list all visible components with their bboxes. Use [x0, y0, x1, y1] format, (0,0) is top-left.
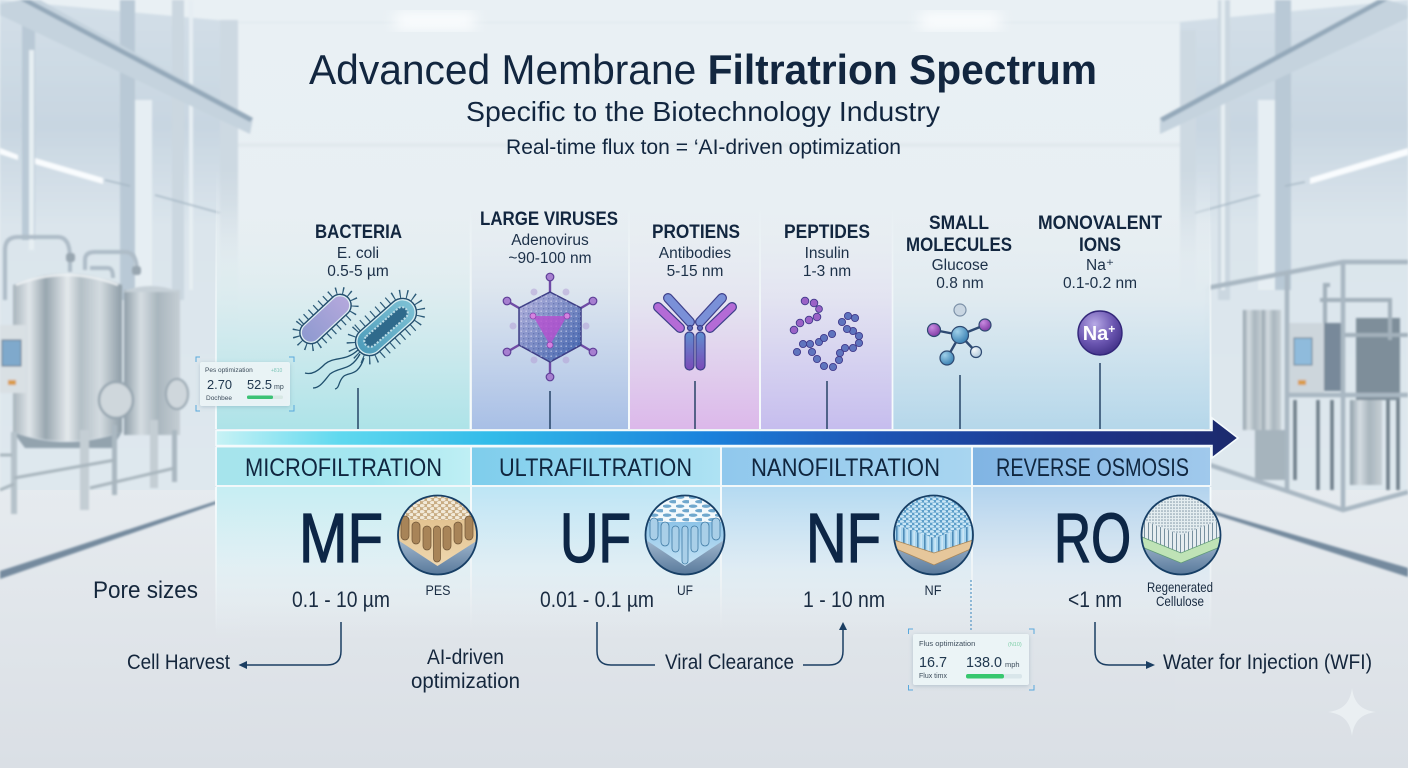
column: ultrafiltration	[472, 448, 726, 612]
text: E. coli size: 0.5-5 µm	[327, 263, 389, 280]
column: nanofiltration	[722, 448, 973, 612]
label: regenerated cellulose: Regenerated	[1147, 579, 1213, 595]
label: UF material: UF	[677, 582, 693, 598]
panel: large viruses	[480, 209, 618, 429]
column backgrounds	[216, 205, 1210, 632]
value: UF pore size: 0.01 - 0.1 µm	[540, 587, 654, 612]
label: nanofiltration: NANOFILTRATION	[751, 454, 940, 482]
abbreviation: RO: RO	[1054, 499, 1131, 577]
text: AI-driven optimization: AI-driven	[427, 645, 504, 669]
label: regenerated cellulose: Cellulose	[1156, 593, 1204, 609]
icon: sodium ion	[1078, 311, 1122, 355]
abbreviation: NF: NF	[806, 499, 881, 577]
heading: peptides: PEPTIDES	[784, 222, 870, 243]
callout: flux optimization right: (N10)	[1008, 642, 1022, 648]
icon: UF membrane	[646, 495, 726, 574]
icon: flagella	[305, 350, 364, 389]
icon: sodium ion: Na	[1083, 323, 1108, 345]
text: adenovirus size: Adenovirus	[511, 232, 589, 249]
icon: large bacterium	[344, 287, 428, 367]
value: RO pore size: <1 nm	[1068, 587, 1122, 612]
text: viral clearance: Viral Clearance	[665, 650, 794, 674]
text: antibodies size: Antibodies	[659, 245, 731, 262]
arrow: RO to WFI	[1095, 622, 1155, 669]
column: reverse osmosis	[973, 448, 1220, 612]
callout: flux optimization left: Pes optimization	[205, 367, 253, 374]
callout: flux optimization left: Dochbee	[206, 395, 232, 402]
heading: proteins: PROTIENS	[652, 222, 740, 243]
equipment: water purification skid	[1207, 262, 1408, 510]
callout: flux optimization left: mp	[274, 384, 284, 391]
text: sodium size: Na⁺	[1086, 257, 1114, 274]
callout: flux optimization right: 16.7	[919, 654, 947, 671]
text: water for injection: Water for Injection (WFI)	[1163, 650, 1372, 674]
heading: large viruses: LARGE VIRUSES	[480, 209, 618, 230]
text: insulin size: Insulin	[805, 245, 849, 262]
dotted connector	[970, 580, 972, 632]
icon: sodium ion: +	[1108, 322, 1115, 336]
text: insulin size: 1-3 nm	[803, 263, 851, 280]
heading: small molecules: MOLECULES	[906, 235, 1012, 256]
value: NF pore size: 1 - 10 nm	[803, 587, 885, 612]
icon: RO membrane	[1142, 495, 1220, 574]
icon: antibody	[658, 298, 732, 370]
icon: sparkle watermark	[1328, 688, 1376, 736]
callout: flux optimization left	[196, 357, 294, 411]
callout: flux optimization right: Flus optimization	[919, 639, 975, 648]
column: microfiltration	[217, 448, 478, 612]
equipment: stainless steel tanks	[0, 237, 188, 514]
panel: bacteria	[291, 222, 428, 429]
stem: peptides	[826, 381, 828, 429]
header: nanofiltration	[722, 448, 971, 485]
label: pore sizes: Pore sizes	[93, 577, 198, 604]
centre panel veil	[216, 170, 1210, 640]
text: sodium size: 0.1-0.2 nm	[1063, 275, 1137, 292]
label: microfiltration: MICROFILTRATION	[245, 454, 442, 482]
column dividers	[216, 205, 1210, 632]
stem: molecules	[959, 375, 961, 429]
header: ultrafiltration	[472, 448, 720, 485]
title: Advanced Membrane Filtratrion Spectrum	[309, 46, 1097, 93]
heading: small molecules: SMALL	[929, 213, 989, 234]
text: adenovirus size: ~90-100 nm	[508, 250, 592, 267]
callout: flux optimization right: 138.0	[966, 654, 1002, 671]
tagline: Real-time flux ton = ‘AI-driven optimization	[506, 135, 901, 159]
heading: monovalent ions: IONS	[1079, 235, 1121, 256]
text: glucose size: 0.8 nm	[936, 275, 984, 292]
panel: proteins	[652, 222, 740, 429]
stem: ions	[1099, 363, 1101, 429]
callout: flux optimization left: 52.5	[247, 377, 272, 392]
icon: NF membrane	[894, 495, 973, 574]
arrow: viral clearance to NF	[803, 622, 847, 665]
arrow: UF to viral clearance	[597, 622, 655, 665]
icon: peptide chain	[790, 297, 863, 371]
panel: peptides	[784, 222, 870, 429]
abbreviation: MF: MF	[299, 499, 383, 577]
text: antibodies size: 5-15 nm	[667, 263, 723, 280]
stem: proteins	[694, 381, 696, 429]
callout: flux optimization left: +810	[271, 368, 282, 374]
arrow: MF to cell harvest	[238, 622, 341, 669]
text: glucose size: Glucose	[932, 257, 988, 274]
callout: flux optimization right	[908, 629, 1034, 690]
text: AI-driven optimization: optimization	[411, 669, 520, 693]
text: cell harvest: Cell Harvest	[127, 650, 230, 674]
header: microfiltration	[217, 448, 470, 485]
label: PES: PES	[426, 582, 450, 598]
text: E. coli size: E. coli	[337, 245, 379, 262]
spectrum arrow	[216, 418, 1238, 458]
label: ultrafiltration: ULTRAFILTRATION	[499, 454, 692, 482]
header: reverse osmosis	[973, 448, 1210, 485]
icon: PES membrane	[398, 495, 478, 574]
icon: molecule	[928, 304, 991, 365]
label: NF material: NF	[924, 582, 942, 598]
heading: monovalent ions: MONOVALENT	[1038, 213, 1162, 234]
label: reverse osmosis: REVERSE OSMOSIS	[996, 454, 1189, 482]
stem: bacteria	[357, 388, 359, 429]
icon: adenovirus	[503, 273, 597, 381]
panel: small molecules and ions	[906, 213, 1162, 429]
icon: small bacterium	[291, 286, 360, 352]
subtitle: Specific to the Biotechnology Industry	[466, 96, 940, 127]
callout: flux optimization left: 2.70	[207, 377, 232, 392]
value: MF pore size: 0.1 - 10 µm	[292, 587, 390, 612]
abbreviation: UF: UF	[560, 499, 631, 577]
heading: bacteria: BACTERIA	[315, 222, 402, 243]
callout: flux optimization right: mph	[1005, 660, 1020, 669]
stem: viruses	[549, 391, 551, 429]
callout: flux optimization right: Flux timx	[919, 673, 948, 680]
